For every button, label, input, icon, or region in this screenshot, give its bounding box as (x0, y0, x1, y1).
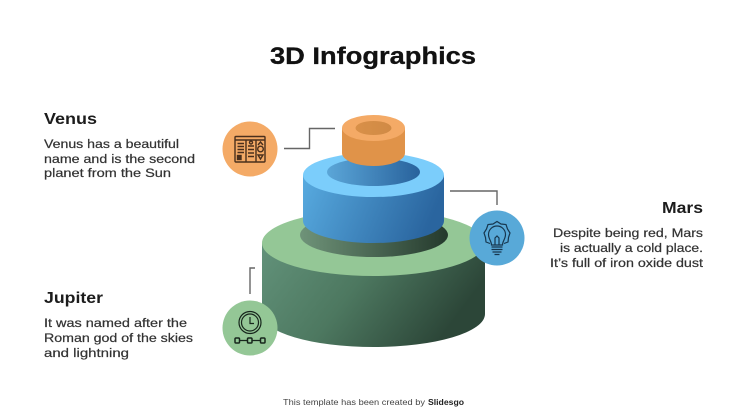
description: Mars: is actually a cold place. (560, 241, 703, 255)
text block: Jupiter (44, 290, 193, 360)
description: Venus: Venus has a beautiful (44, 137, 179, 151)
icon: Mars light bulb (470, 210, 524, 266)
description: Jupiter (44, 316, 193, 360)
description: Venus: planet from the Sun (44, 166, 171, 180)
description: Venus: name and is the second (44, 152, 195, 166)
description: Mars (550, 226, 704, 270)
description: Mars: It’s full of iron oxide dust (550, 256, 704, 270)
description: Jupiter: It was named after the (44, 316, 187, 330)
orange cylinder (342, 115, 405, 166)
footer credit: This template has been created by (283, 398, 426, 407)
description: Mars: Despite being red, Mars (553, 226, 703, 240)
blue cylinder (303, 153, 444, 243)
3D stacked cylinders (262, 115, 485, 347)
heading: Jupiter: Jupiter (44, 290, 103, 307)
icon: Venus control panel (222, 122, 278, 176)
footer brand: Slidesgo (428, 398, 464, 407)
text block: Mars (550, 200, 704, 270)
green cylinder (262, 210, 485, 347)
icon: Jupiter clock and chain (222, 300, 278, 356)
connector: Jupiter (250, 268, 255, 294)
description: Venus (44, 137, 195, 180)
heading: Venus: Venus (44, 111, 97, 128)
connector: Venus (284, 128, 335, 148)
heading: Mars: Mars (662, 200, 703, 217)
description: Jupiter: Roman god of the skies (44, 331, 193, 345)
connector: Mars (450, 191, 497, 205)
title: 3D Infographics (270, 43, 476, 70)
text block: Venus (44, 111, 195, 180)
description: Jupiter: and lightning (44, 346, 129, 360)
